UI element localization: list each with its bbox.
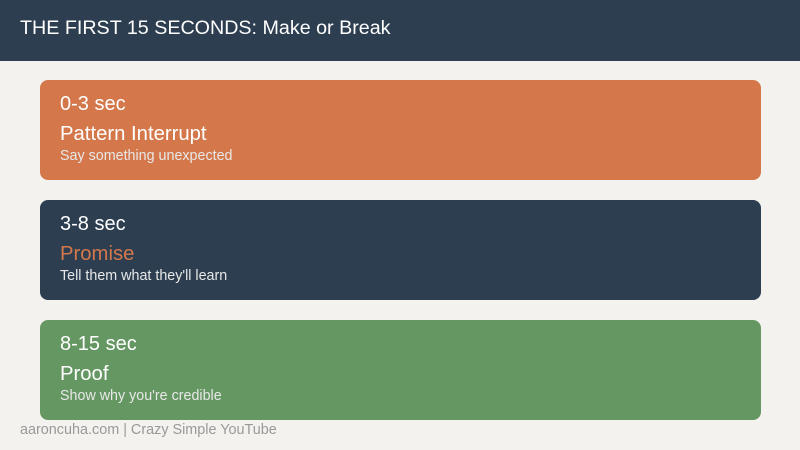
panel: 8-15 sec: Proof	[60, 363, 108, 385]
panel: 3-8 sec: 3-8 sec	[60, 213, 126, 235]
panel: 0-3 sec: Say something unexpected	[60, 148, 232, 164]
panel: 8-15 sec: 8-15 sec	[60, 333, 137, 355]
panel: 3-8 sec: Tell them what they'll learn	[60, 268, 227, 284]
panel: 3-8 sec	[40, 200, 761, 300]
header: THE FIRST 15 SECONDS: Make or Break	[20, 17, 391, 39]
panel: 8-15 sec: Show why you're credible	[60, 388, 222, 404]
header	[0, 0, 800, 61]
panel: 0-3 sec: Pattern Interrupt	[60, 123, 207, 145]
panel: 3-8 sec: Promise	[60, 243, 134, 265]
panel: 0-3 sec: 0-3 sec	[60, 93, 126, 115]
panel: 0-3 sec	[40, 80, 761, 180]
footer: aaroncuha.com | Crazy Simple YouTube	[20, 422, 277, 438]
panel: 8-15 sec	[40, 320, 761, 420]
